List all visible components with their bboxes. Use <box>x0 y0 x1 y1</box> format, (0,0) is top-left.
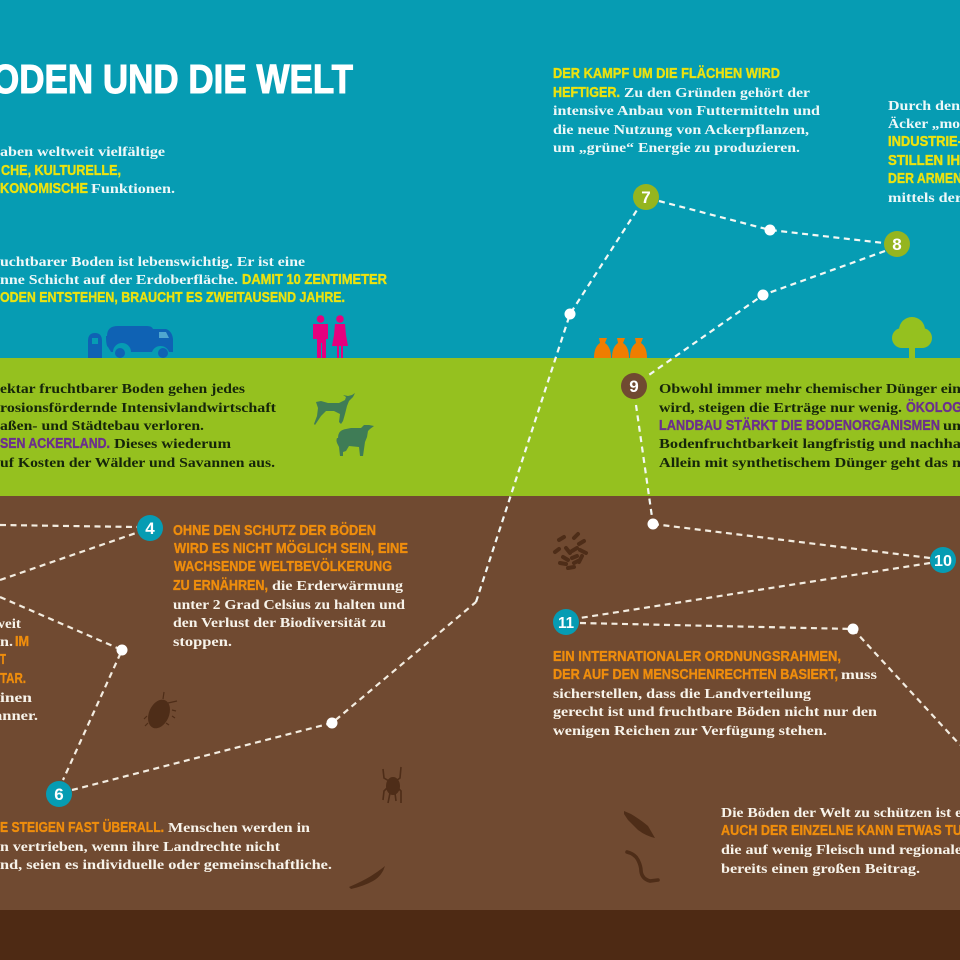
number badge 10: 10 <box>934 553 952 570</box>
icon: tanker truck <box>106 326 173 358</box>
background: sky <box>0 0 960 358</box>
text block: industrial nations: mittels der <box>888 191 960 206</box>
text block: functions of soil <box>0 145 175 197</box>
number badge 8 <box>884 231 910 257</box>
number badge 6: 6 <box>54 785 64 804</box>
text block: chemical fertiliser: wird, steigen die Erträge nur wenig. <box>659 401 902 416</box>
text block: competition for land: DER KAMPF UM DIE FLÄCHEN WIRD <box>553 65 780 82</box>
text block: consumption per hectare fragment: T <box>0 652 6 668</box>
number badge 9: 9 <box>629 377 639 396</box>
icon: fertiliser sacks <box>594 338 647 358</box>
text block: international framework: muss <box>841 668 878 683</box>
text block: land rights <box>0 819 332 873</box>
dashed connector path <box>0 201 960 790</box>
number badge 8: 8 <box>892 235 902 254</box>
text block: land rights: n vertrieben, wenn ihre Landrechte nicht <box>0 840 280 855</box>
text block: competition for land: HEFTIGER. <box>553 85 620 101</box>
waypoint dots <box>116 224 858 728</box>
text block: chemical fertiliser: Bodenfruchtbarkeit langfristig und nachha <box>659 437 960 452</box>
number badge 9 <box>621 373 647 399</box>
text block: protecting soils <box>173 522 408 650</box>
text block: loss of fertile soil: rosionsfördernde Intensivlandwirtschaft <box>0 401 276 416</box>
text block: industrial nations: Äcker „mo <box>888 116 960 132</box>
text block: protecting soils: unter 2 Grad Celsius zu halten und <box>173 598 405 613</box>
title: ODEN UND DIE WELT <box>0 56 353 102</box>
text block: chemical fertiliser <box>659 382 960 471</box>
icon: man and woman <box>313 315 348 358</box>
text block: individual contribution: die auf wenig Fleisch und regionale <box>721 843 960 858</box>
icon: woodlouse <box>144 692 177 732</box>
text block: competition for land: intensive Anbau von Futtermitteln und <box>553 104 820 119</box>
number badge 7: 7 <box>641 188 651 207</box>
icon: sheep <box>336 425 374 456</box>
text block: chemical fertiliser: Obwohl immer mehr chemischer Dünger ein <box>659 382 960 397</box>
icon: earthworm <box>627 852 658 881</box>
number badge 7 <box>633 184 659 210</box>
number badge 11: 11 <box>558 615 574 632</box>
icon: soil droppings <box>555 534 586 568</box>
background: soil layer <box>0 496 960 911</box>
text block: consumption per hectare fragment: n. <box>0 635 13 650</box>
text block: individual contribution: Die Böden der Welt zu schützen ist e <box>721 806 960 821</box>
text block: chemical fertiliser: Allein mit synthetischem Dünger geht das n <box>659 456 960 471</box>
text block: land rights: E STEIGEN FAST ÜBERALL. <box>0 819 164 836</box>
number badge 4 <box>137 515 163 541</box>
text block: international framework: wenigen Reichen zur Verfügung stehen. <box>553 724 827 739</box>
text block: competition for land: Zu den Gründen gehört der <box>624 86 810 101</box>
text block: competition for land: die neue Nutzung von Ackerpflanzen, <box>553 123 809 138</box>
number badge 10 <box>930 547 956 573</box>
text block: loss of fertile soil: SEN ACKERLAND. <box>0 436 110 452</box>
text block: international framework: gerecht ist und fruchtbare Böden nicht nur den <box>553 705 877 720</box>
text block: international framework: EIN INTERNATIONALER ORDNUNGSRAHMEN, <box>553 649 841 665</box>
icon: grazing deer <box>314 393 355 425</box>
text block: loss of fertile soil: uf Kosten der Wälder und Savannen aus. <box>0 456 275 471</box>
text block: international framework: sicherstellen, dass die Landverteilung <box>553 687 811 702</box>
text block: loss of fertile soil <box>0 382 276 471</box>
text block: competition for land <box>553 65 820 156</box>
text block: individual contribution <box>721 806 960 877</box>
text block: protecting soils: stoppen. <box>173 635 232 650</box>
text block: functions of soil: aben weltweit vielfältige <box>0 145 165 160</box>
text block: consumption per hectare fragment <box>0 617 38 724</box>
number badge 6 <box>46 781 72 807</box>
text block: protecting soils: den Verlust der Biodiversität zu <box>173 616 386 631</box>
text block: consumption per hectare fragment: TAR. <box>0 671 26 687</box>
text block: chemical fertiliser: un <box>943 419 960 434</box>
text block: competition for land: um „grüne“ Energie zu produzieren. <box>553 141 800 156</box>
background: grass layer <box>0 358 960 496</box>
icon: spider <box>383 767 401 803</box>
text block: protecting soils: WACHSENDE WELTBEVÖLKERUNG <box>174 558 392 575</box>
icon: petrol pump <box>88 333 102 358</box>
number badge 11 <box>553 609 579 635</box>
text block: loss of fertile soil: ektar fruchtbarer Boden gehen jedes <box>0 382 246 397</box>
text block: fertile soil: ODEN ENTSTEHEN, BRAUCHT ES ZWEITAUSEND JAHRE. <box>0 290 345 306</box>
text block: fertile soil <box>0 255 387 306</box>
text block: functions of soil: Funktionen. <box>91 182 175 197</box>
text block: loss of fertile soil: aßen- und Städtebau verloren. <box>0 419 204 434</box>
text block: consumption per hectare fragment: IM <box>15 634 29 650</box>
icon: larva <box>349 866 385 889</box>
text block: international framework: DER AUF DEN MENSCHENRECHTEN BASIERT, <box>553 667 838 683</box>
text block: protecting soils: die Erderwärmung <box>272 579 403 594</box>
text block: protecting soils: WIRD ES NICHT MÖGLICH SEIN, EINE <box>174 540 408 557</box>
text block: functions of soil: CHE, KULTURELLE, <box>1 163 121 179</box>
text block: individual contribution: bereits einen großen Beitrag. <box>721 862 920 877</box>
text block: fertile soil: DAMIT 10 ZENTIMETER <box>242 272 387 288</box>
text block: fertile soil: nne Schicht auf der Erdoberfläche. <box>0 273 238 288</box>
text block: industrial nations <box>888 99 960 206</box>
text block: international framework <box>553 649 878 739</box>
icon: beetle larva <box>624 811 655 838</box>
text block: protecting soils: OHNE DEN SCHUTZ DER BÖDEN <box>173 522 376 539</box>
text block: consumption per hectare fragment: inen <box>0 691 32 706</box>
text block: land rights: nd, seien es individuelle oder gemeinschaftliche. <box>0 858 332 873</box>
number badge 4: 4 <box>145 519 155 538</box>
text block: functions of soil: KONOMISCHE <box>0 181 88 197</box>
background: deep soil layer <box>0 910 960 960</box>
text block: protecting soils: ZU ERNÄHREN, <box>173 577 268 594</box>
text block: fertile soil: uchtbarer Boden ist lebenswichtig. Er ist eine <box>0 255 305 270</box>
text block: loss of fertile soil: Dieses wiederum <box>114 437 231 452</box>
icon: tree <box>892 317 932 359</box>
text block: industrial nations: Durch den <box>888 99 960 114</box>
text block: land rights: Menschen werden in <box>168 821 310 836</box>
